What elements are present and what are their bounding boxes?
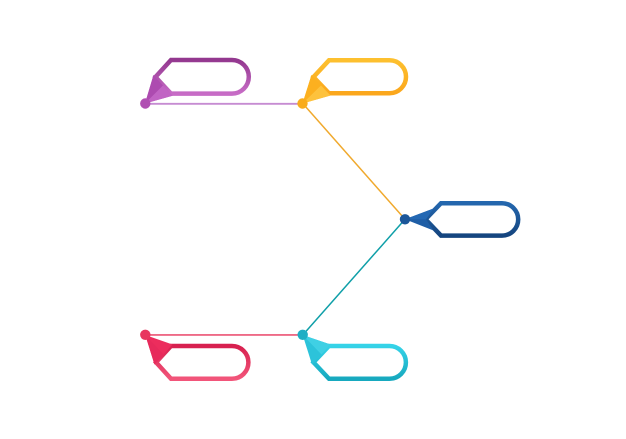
- connector: purple to yellow: [145, 103, 303, 105]
- callout: purple: [140, 60, 249, 109]
- callout: cyan: [298, 330, 406, 379]
- connector: yellow to blue: [303, 104, 405, 219]
- callout: yellow: [297, 60, 406, 109]
- connector: blue to cyan: [303, 219, 405, 335]
- callout: blue: [400, 203, 518, 236]
- callout: red: [140, 330, 248, 379]
- connector: red to cyan: [145, 334, 303, 336]
